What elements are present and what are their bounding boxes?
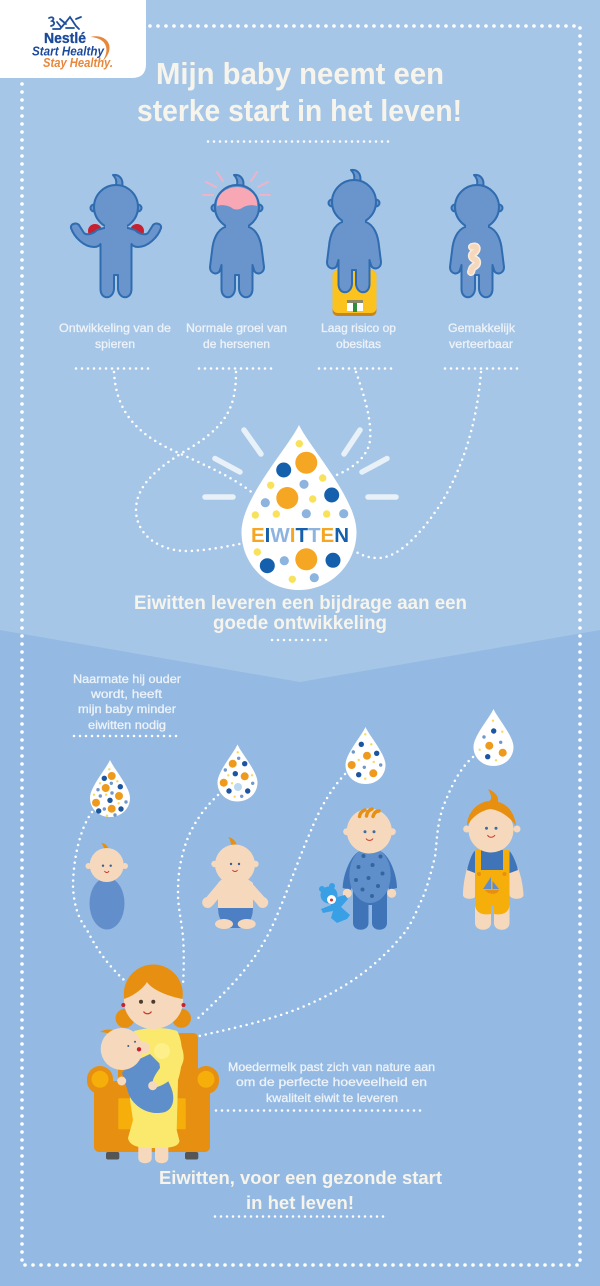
- label: de hersenen: [203, 337, 270, 351]
- text: older baby needs less protein: [73, 672, 181, 732]
- text: breast milk: [228, 1060, 435, 1105]
- text: older baby needs less protein: Naarmate hij ouder: [73, 672, 181, 686]
- logo: arc: [90, 36, 110, 62]
- legs: [475, 905, 510, 930]
- label: verteerbaar: [449, 337, 513, 351]
- child in yellow overalls: [463, 789, 524, 930]
- text: older baby needs less protein: mijn baby minder: [78, 702, 176, 716]
- infant in diaper: [202, 837, 268, 929]
- legs: [138, 1145, 168, 1163]
- label: [448, 321, 516, 351]
- romper: [343, 850, 397, 930]
- mother's arm: [153, 1030, 184, 1088]
- closing heading: in het leven!: [246, 1192, 354, 1213]
- benefit: brain: [186, 172, 287, 368]
- dress: [128, 1028, 182, 1148]
- title: [137, 56, 462, 128]
- connectors: benefits to drop: [114, 372, 481, 558]
- label: spieren: [95, 337, 135, 351]
- boat: [483, 877, 499, 889]
- small drop 3: [346, 727, 386, 784]
- benefit: digestion: [445, 175, 520, 368]
- brain rays: [203, 172, 270, 195]
- text: older baby needs less protein: wordt, heeft: [90, 687, 163, 701]
- shirt: [467, 850, 518, 873]
- small drop 2: [218, 744, 258, 802]
- closing heading: Eiwitten, voor een gezonde start: [159, 1167, 442, 1188]
- icon: baby with muscles: [71, 175, 161, 297]
- label: Laag risico op: [321, 321, 396, 335]
- title: Mijn baby neemt een: [156, 56, 444, 91]
- protein rays: [205, 430, 396, 497]
- icon: baby with brain: [203, 172, 270, 297]
- label: Ontwikkeling van de: [59, 321, 171, 335]
- icon: yellow scale: [332, 270, 376, 316]
- icon: teddy bear: [319, 883, 350, 923]
- logo panel: [0, 0, 146, 78]
- label: obesitas: [336, 337, 381, 351]
- arms: [463, 868, 524, 899]
- label: Gemakkelijk: [448, 321, 516, 335]
- label: Normale groei van: [186, 321, 287, 335]
- connectors: mother to small drops: [73, 757, 473, 1036]
- icon: baby on scale: [327, 170, 381, 292]
- toddler in blue romper: [319, 808, 397, 930]
- logo: Start Healthy: Start Healthy: [32, 44, 105, 58]
- armchair: [87, 1033, 219, 1160]
- heading: protein contribution: [134, 592, 467, 634]
- overalls: [475, 850, 510, 914]
- head: [343, 828, 350, 835]
- text: breast milk: om de perfecte hoeveelheid en: [236, 1075, 427, 1089]
- logo: nest icon: [49, 17, 81, 29]
- title: sterke start in het leven!: [137, 93, 462, 128]
- text: breast milk: Moedermelk past zich van nature aan: [228, 1060, 435, 1074]
- label: [59, 321, 171, 351]
- label: [321, 321, 396, 351]
- mother breastfeeding in armchair: [87, 964, 219, 1163]
- small drop 4: [474, 709, 514, 766]
- heading: protein contribution: Eiwitten leveren een bijdrage aan een: [134, 592, 467, 614]
- nursing baby: [100, 1028, 173, 1113]
- head and hair: [116, 1009, 134, 1028]
- benefit: muscles: [59, 175, 171, 368]
- icon: baby with intestine: [450, 175, 504, 297]
- logo: Nestlé wordmark: Nestlé: [44, 31, 86, 47]
- large protein drop: [242, 425, 356, 590]
- text: older baby needs less protein: eiwitten nodig: [88, 718, 166, 732]
- heading: protein contribution: goede ontwikkeling: [213, 612, 387, 634]
- logo: Stay Healthy: Stay Healthy.: [43, 56, 113, 70]
- small drop 1: [90, 760, 130, 817]
- background lower chevron panel: [0, 630, 600, 1286]
- swaddled newborn: [86, 843, 128, 930]
- drop label: EIWITTEN: [251, 524, 349, 547]
- text: breast milk: kwaliteit eiwit te leveren: [266, 1091, 398, 1105]
- head: [463, 826, 470, 832]
- label: [186, 321, 287, 351]
- benefit: obesity: [319, 170, 396, 368]
- closing heading: [159, 1167, 442, 1213]
